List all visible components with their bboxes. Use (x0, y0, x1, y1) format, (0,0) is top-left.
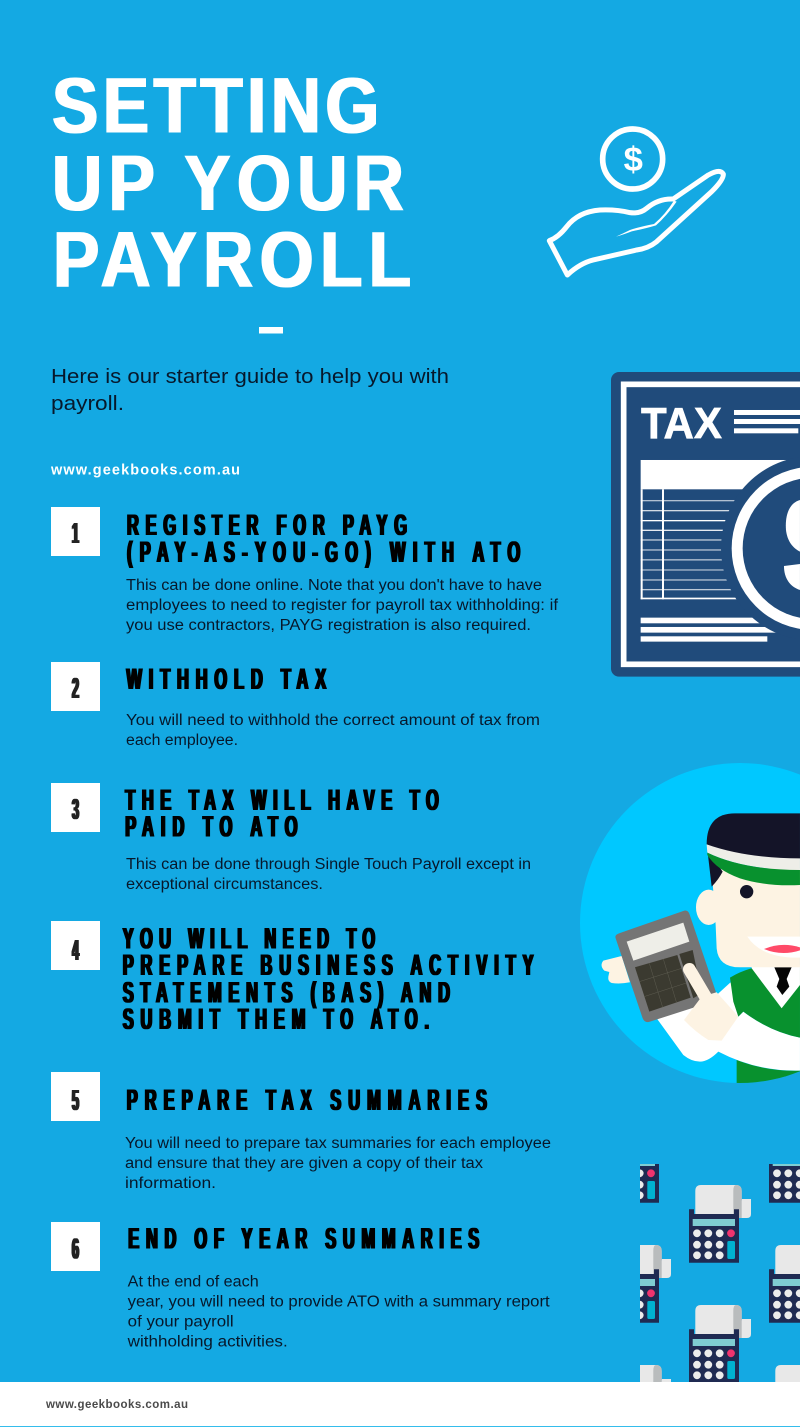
step 1 text: you use contractors, PAYG registration is also required. (126, 617, 531, 634)
footer bar (0, 1382, 800, 1427)
step 5 (51, 1072, 551, 1192)
step 1 heading: (PAY-AS-YOU-GO) WITH ATO (127, 536, 520, 569)
step 3 heading (125, 784, 439, 844)
step 2 text (126, 712, 540, 749)
step 3 text: exceptional circumstances. (126, 876, 323, 893)
number box 3: 3 (72, 793, 79, 825)
step 6 text: withholding activities. (127, 1334, 288, 1351)
step 2 text: each employee. (126, 732, 238, 749)
step 5 text: information. (125, 1175, 216, 1192)
title accent dash (259, 327, 283, 334)
calculator pattern (640, 1164, 800, 1382)
step 3 text: This can be done through Single Touch Payroll except in (126, 856, 531, 873)
intro text: Here is our starter guide to help you with (51, 366, 449, 388)
step 4 heading: STATEMENTS (BAS) AND (123, 976, 450, 1010)
step 5 text (125, 1135, 551, 1192)
step 3 heading: PAID TO ATO (125, 811, 297, 844)
step 2 text: You will need to withhold the correct amount of tax from (126, 712, 540, 729)
number box 4 (51, 921, 100, 970)
step 3 (51, 783, 531, 893)
step 2 heading: WITHHOLD TAX (126, 663, 326, 696)
number box 5 (51, 1072, 100, 1121)
number box 2 (51, 662, 100, 711)
icon: hand holding coin (549, 129, 723, 275)
step 4 heading (123, 922, 534, 1036)
footer website: www.geekbooks.com.au (45, 1399, 188, 1411)
icon: tax document: TAX (641, 400, 722, 448)
step 3 text (126, 856, 531, 893)
number box 6 (51, 1222, 100, 1271)
step 1 text: employees to need to register for payroll tax withholding: if (126, 597, 559, 614)
icon: hand holding coin: $ (624, 141, 643, 179)
illustration: accountant with calculator (580, 763, 800, 1088)
number box 1: 1 (72, 517, 79, 549)
step 6 (51, 1222, 550, 1351)
intro text (51, 366, 449, 415)
step 6 text: year, you will need to provide ATO with a summary report (128, 1294, 550, 1311)
step 6 text: At the end of each (128, 1274, 259, 1291)
step 4 heading: PREPARE BUSINESS ACTIVITY (123, 949, 534, 982)
step 4 heading: SUBMIT THEM TO ATO. (123, 1003, 429, 1036)
step 4 (51, 921, 534, 1036)
step 1 heading: REGISTER FOR PAYG (127, 509, 407, 542)
step 1 text (126, 577, 559, 634)
number box 5: 5 (72, 1084, 79, 1116)
title (52, 62, 411, 304)
number box 3 (51, 783, 100, 832)
step 5 heading: PREPARE TAX SUMMARIES (127, 1084, 487, 1117)
number box 6: 6 (72, 1233, 79, 1265)
step 1 (51, 507, 559, 634)
step 1 text: This can be done online. Note that you don't have to have (126, 577, 542, 594)
step 1 heading (127, 509, 520, 569)
step 3 heading: THE TAX WILL HAVE TO (125, 784, 439, 817)
step 5 text: You will need to prepare tax summaries for each employee (125, 1135, 551, 1152)
title: UP YOUR (52, 139, 404, 227)
title: SETTING (52, 62, 379, 150)
website link: www.geekbooks.com.au (50, 462, 240, 478)
step 6 heading: END OF YEAR SUMMARIES (128, 1222, 479, 1256)
step 5 text: and ensure that they are given a copy of their tax (125, 1155, 483, 1172)
step 2 (51, 662, 540, 749)
icon: tax document (611, 372, 800, 677)
step 6 text: of your payroll (128, 1314, 234, 1331)
number box 1 (51, 507, 100, 556)
step 6 text (127, 1274, 550, 1351)
step 4 heading: YOU WILL NEED TO (123, 922, 375, 956)
number box 4: 4 (72, 934, 79, 966)
intro text: payroll. (51, 393, 124, 415)
title: PAYROLL (53, 216, 411, 304)
number box 2: 2 (72, 672, 79, 704)
